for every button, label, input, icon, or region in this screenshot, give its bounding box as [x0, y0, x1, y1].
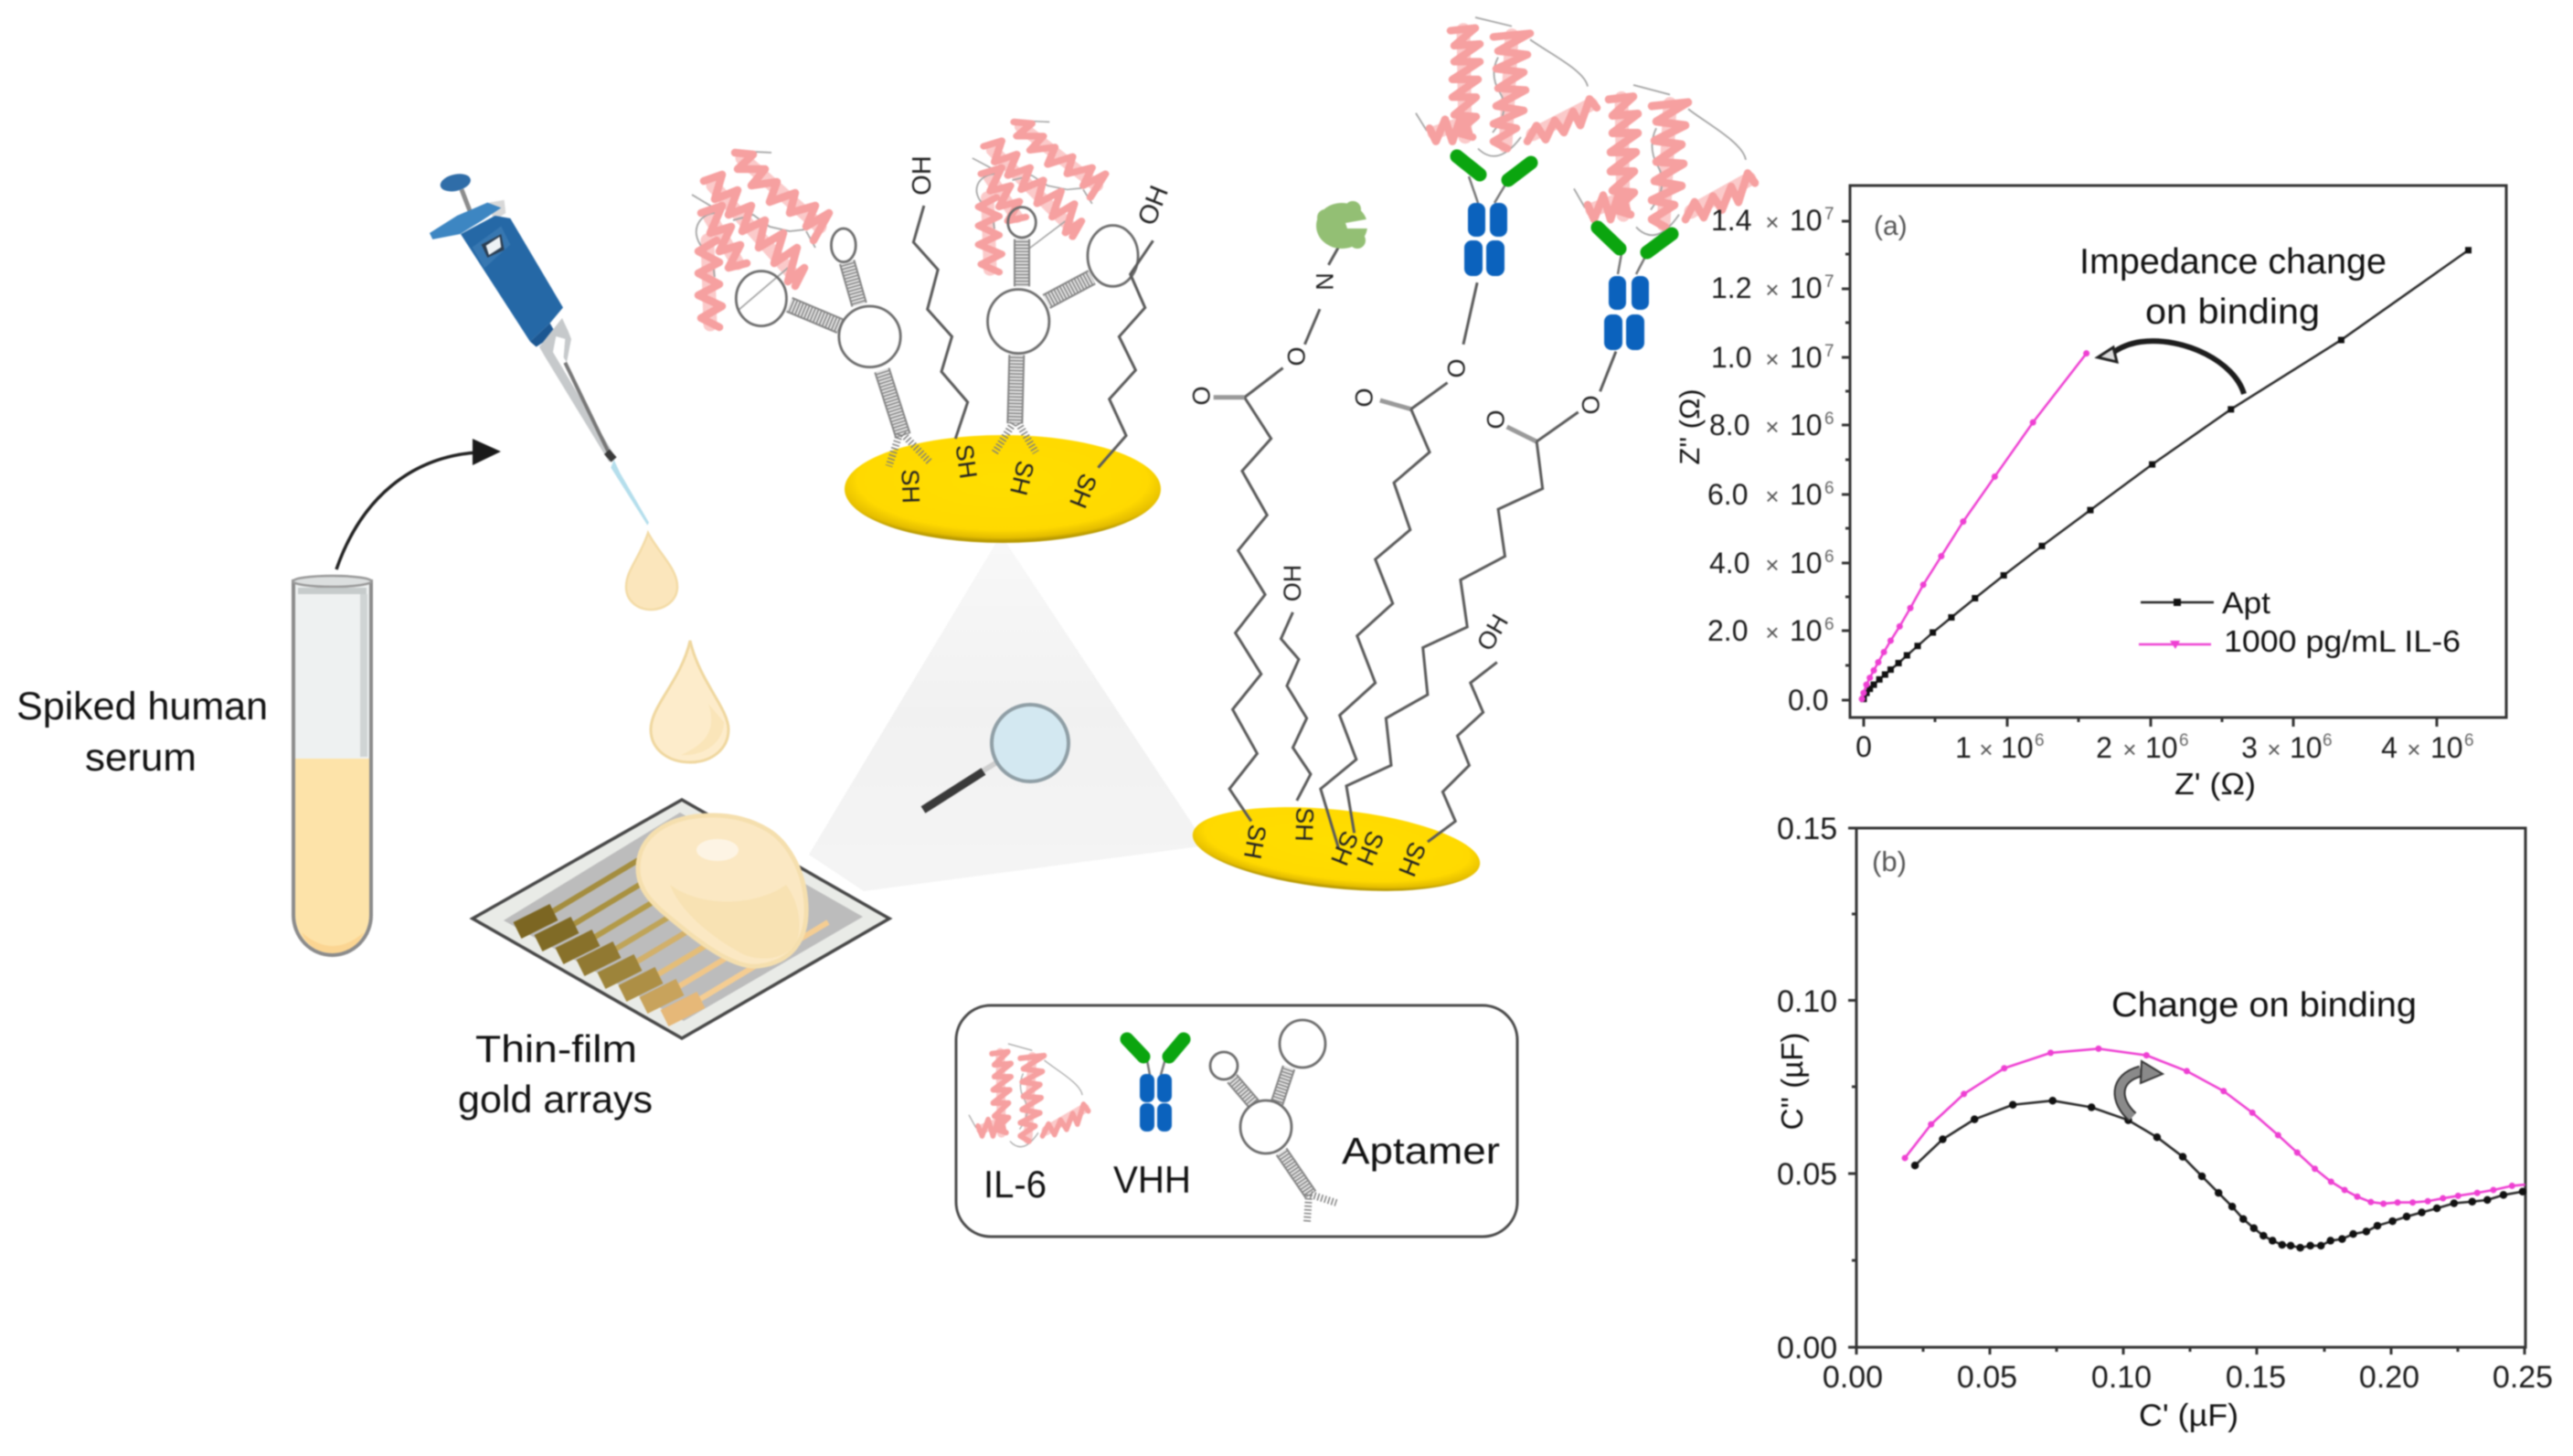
carboxyl alkane chains: [1214, 248, 1616, 848]
IL-6 protein right: [973, 121, 1105, 272]
panel tag: (a): [1874, 211, 1908, 241]
y tick labels: 6: [1824, 615, 1834, 634]
hydroxyl labels: OH: [908, 155, 937, 196]
x tick labels: 10: [2145, 731, 2178, 764]
x tick labels: 0.15: [2226, 1360, 2286, 1395]
chart legend: [2139, 586, 2461, 658]
x tick labels: 0.25: [2493, 1360, 2553, 1395]
thiol labels: SH: [1064, 470, 1102, 512]
y tick labels: 7: [1824, 272, 1834, 292]
data series: 1000 pg/mL IL-6: [1905, 1048, 2525, 1204]
thiol labels: SH: [1290, 807, 1319, 842]
label: spiked human serum: Spiked human: [16, 685, 268, 728]
thiol labels: SH: [1239, 823, 1271, 861]
oxygen and nitrogen labels: O: [1350, 388, 1377, 408]
x tick labels: 0.00: [1823, 1360, 1883, 1395]
y tick labels: ×: [1765, 413, 1780, 441]
VHH antibody lower: [1598, 228, 1672, 350]
y tick labels: 0.15: [1777, 812, 1837, 846]
gold electrode lines and pads: [517, 834, 828, 1018]
x tick labels: ×: [1979, 736, 1994, 763]
panel: aptamer sensor surface: [692, 121, 1175, 543]
oxygen and nitrogen labels: [1187, 272, 1604, 430]
y tick labels: ×: [1765, 208, 1780, 236]
x axis title: Z' (Ω): [2174, 767, 2256, 801]
y tick labels: 10: [1790, 271, 1823, 304]
x tick labels: 10: [2430, 731, 2463, 764]
chart (b): capacitance plot: [1775, 812, 2553, 1433]
gold electrode disc: [845, 435, 1161, 543]
panel: VHH and control surface: [1187, 17, 1755, 903]
thiol labels: SH: [951, 442, 982, 481]
x tick labels: 10: [2290, 731, 2323, 764]
label: thin-film gold arrays: Thin-film: [475, 1027, 637, 1070]
thiol labels: SH: [896, 469, 925, 504]
x tick labels: 0: [1855, 730, 1872, 763]
IL-6 protein bound lower: [1574, 85, 1755, 235]
x tick labels: 6: [2179, 731, 2189, 750]
x tick labels: 0.10: [2091, 1360, 2152, 1395]
x tick labels: 10: [2001, 731, 2034, 764]
x tick labels: [1823, 1360, 2553, 1395]
y axis title: C'' (µF): [1775, 1033, 1809, 1130]
thiol labels: SH: [1005, 458, 1039, 498]
hydroxyl labels: OH: [1472, 610, 1514, 655]
y tick labels: ×: [1765, 483, 1780, 510]
x tick labels: 0.20: [2359, 1360, 2419, 1395]
y tick labels: 10: [1790, 614, 1823, 647]
plot frame and ticks: [1848, 828, 2525, 1355]
chart legend: 1000 pg/mL IL-6: [2224, 624, 2461, 658]
arrow: impedance change: [2098, 341, 2244, 394]
y tick labels: [1777, 812, 1837, 1366]
x tick labels: 3: [2241, 731, 2258, 764]
y tick labels: ×: [1765, 619, 1780, 646]
label: IL-6: IL-6: [983, 1163, 1047, 1206]
y tick labels: 7: [1824, 342, 1834, 361]
label: Aptamer: Aptamer: [1342, 1130, 1500, 1172]
x tick labels: [1855, 730, 2474, 764]
hydroxyl labels: [908, 155, 1175, 229]
panel tag: (b): [1872, 845, 1907, 877]
annotation: impedance change: Impedance change: [2079, 242, 2387, 282]
y tick labels: 10: [1790, 204, 1823, 237]
thiol labels: [896, 442, 1102, 512]
y tick labels: 10: [1790, 478, 1823, 511]
hydroxyl labels: OH: [1279, 565, 1306, 601]
aptamers and alkane chains: [736, 206, 1154, 468]
icon: test tube with serum: [292, 576, 371, 955]
y tick labels: 10: [1790, 547, 1823, 579]
hydroxyl labels: [1279, 565, 1514, 655]
label: spiked human serum: [16, 685, 268, 780]
IL-6 protein bound top: [1416, 17, 1597, 156]
y tick labels: ×: [1765, 551, 1780, 579]
thiol labels: SH: [1393, 838, 1431, 880]
chart legend: Apt: [2222, 586, 2270, 620]
x tick labels: 4: [2381, 731, 2398, 764]
VHH antibody top: [1457, 156, 1531, 276]
x tick labels: 1: [1955, 731, 1972, 764]
arrow: change on binding: [2120, 1061, 2163, 1117]
y tick labels: 1.4: [1711, 204, 1751, 237]
serum droplet on chip: [638, 815, 806, 966]
arrow: tube to pipette: [336, 439, 501, 569]
thiol labels: [1239, 807, 1431, 880]
y tick labels: 6: [1824, 409, 1834, 429]
icon: aptamer: [1210, 1020, 1336, 1222]
label: thin-film gold arrays: [458, 1027, 653, 1121]
thiol labels: SH: [1351, 827, 1389, 869]
oxygen and nitrogen labels: O: [1282, 346, 1310, 367]
icon: magnifying glass: [923, 705, 1069, 810]
y tick labels: 10: [1790, 409, 1823, 441]
y tick labels: 6: [1824, 547, 1834, 567]
magnification cone: [809, 535, 1207, 891]
data series: Apt: [1864, 250, 2468, 699]
icon: thin-film gold array chip: [473, 800, 889, 1038]
y tick labels: 10: [1790, 341, 1823, 374]
y tick labels: 0.05: [1777, 1157, 1837, 1192]
annotation: impedance change: on binding: [2145, 292, 2320, 332]
x tick labels: 6: [2464, 731, 2474, 750]
IL-6 protein left: [692, 151, 829, 327]
y tick labels: 8.0: [1709, 409, 1749, 441]
y tick labels: 4.0: [1709, 547, 1749, 579]
y axis title: Z'' (Ω): [1674, 388, 1706, 465]
y tick labels: 7: [1824, 205, 1834, 224]
y tick labels: 1.2: [1711, 271, 1751, 304]
x tick labels: ×: [2407, 736, 2421, 763]
y tick labels: 1.0: [1711, 341, 1751, 374]
IL-6 binding fragment blob: [1316, 201, 1371, 249]
data series: 1000 pg/mL IL-6: [1862, 354, 2087, 699]
y tick labels: 0.0: [1788, 684, 1828, 717]
icon: large droplet: [651, 641, 728, 762]
oxygen and nitrogen labels: N: [1311, 272, 1338, 291]
label: spiked human serum: serum: [85, 736, 197, 780]
y tick labels: ×: [1765, 345, 1780, 373]
y tick labels: 0.00: [1777, 1331, 1837, 1366]
icon: pipette: [430, 172, 649, 526]
plot frame and ticks: [1842, 186, 2506, 727]
x axis title: C' (µF): [2139, 1398, 2238, 1433]
thiol labels: SH: [1325, 827, 1364, 869]
y tick labels: [1707, 204, 1834, 717]
oxygen and nitrogen labels: O: [1442, 358, 1470, 378]
hydroxyl labels: OH: [1132, 182, 1175, 229]
y tick labels: ×: [1765, 276, 1780, 303]
x tick labels: ×: [2122, 736, 2137, 763]
oxygen and nitrogen labels: O: [1577, 395, 1604, 415]
x tick labels: ×: [2267, 736, 2281, 763]
oxygen and nitrogen labels: O: [1482, 409, 1509, 430]
x tick labels: 0.05: [1957, 1360, 2017, 1395]
y tick labels: 0.10: [1777, 984, 1837, 1019]
y tick labels: 2.0: [1707, 614, 1748, 647]
chart (a): Nyquist impedance plot: [1674, 186, 2506, 801]
panel: legend: [956, 1005, 1517, 1237]
y tick labels: 6.0: [1707, 478, 1748, 511]
data series: Apt: [1915, 1100, 2523, 1248]
oxygen and nitrogen labels: O: [1187, 386, 1215, 406]
annotation: change on binding: Change on binding: [2111, 986, 2417, 1025]
label: VHH: VHH: [1113, 1158, 1191, 1201]
x tick labels: 6: [2323, 731, 2333, 750]
icon: IL-6: [969, 1044, 1089, 1147]
x tick labels: 2: [2096, 731, 2112, 764]
icon: small droplet: [626, 533, 677, 610]
gold electrode disc: [1188, 795, 1484, 903]
annotation: impedance change: [2079, 242, 2387, 332]
label: thin-film gold arrays: gold arrays: [458, 1078, 653, 1121]
x tick labels: 6: [2035, 731, 2045, 750]
y tick labels: 6: [1824, 479, 1834, 498]
icon: VHH: [1127, 1039, 1184, 1132]
